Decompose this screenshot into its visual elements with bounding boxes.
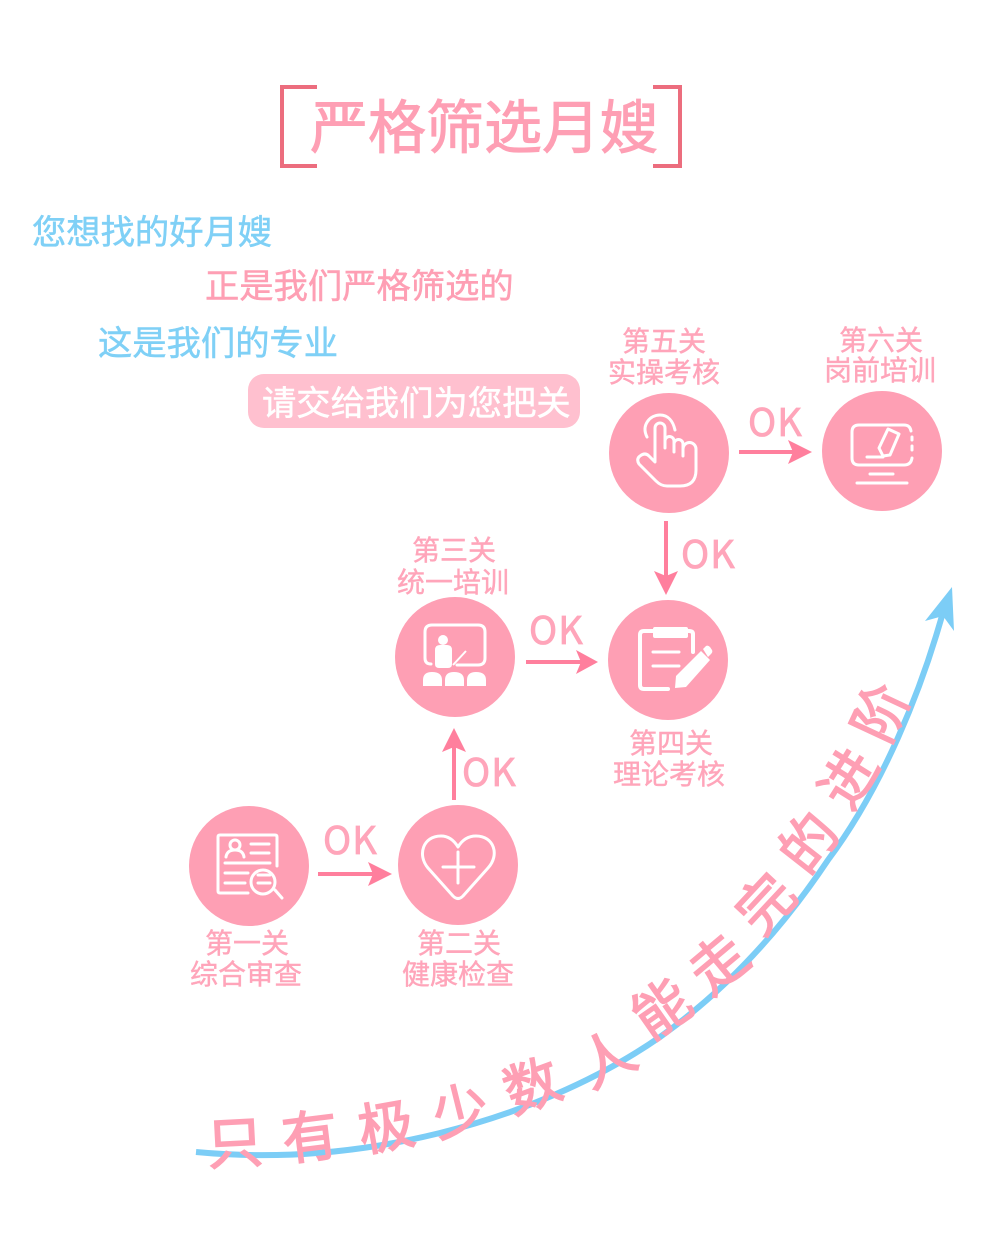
icon: classroom: [423, 625, 486, 686]
curved slogan text: 阶: [841, 674, 922, 751]
arrow: step 5 to 4: [654, 521, 736, 595]
arrow: step 5 to 6: [739, 392, 812, 464]
arrow: step 2 to 3: [442, 728, 517, 800]
curved slogan text: 数: [495, 1047, 570, 1126]
step 3: unified training: 统一培训: [397, 567, 509, 598]
intro text line 1: 您想找的好月嫂: [32, 214, 272, 252]
step 6: on-the-job training: [822, 325, 942, 511]
curved slogan text: 的: [767, 801, 851, 884]
curved slogan text: 能: [621, 967, 703, 1051]
title text: 严格筛选月嫂: [310, 96, 658, 161]
curved slogan text: [205, 674, 922, 1176]
arrow: step 3 to 4: [526, 600, 598, 674]
icon: tapping hand: [638, 415, 696, 486]
label: 第四关: [629, 728, 713, 759]
curved slogan text: 走: [677, 922, 761, 1006]
icon: clipboard and pencil: [640, 627, 712, 689]
arrow: step 1 to 2: OK: [323, 810, 378, 865]
arrow: step 3 to 4: OK: [529, 600, 584, 655]
label: 第一关: [205, 928, 289, 959]
callout pill: 请交给我们为您把关: [262, 385, 571, 423]
intro text line 2: 正是我们严格筛选的: [205, 268, 514, 306]
curved slogan text: 人: [567, 1019, 646, 1100]
step 2: health check: 健康检查: [402, 959, 514, 990]
arrow: step 5 to 4: OK: [681, 524, 736, 579]
icon: heart with plus: [422, 836, 494, 898]
callout pill: [248, 374, 580, 428]
step 4: theory exam: 理论考核: [613, 759, 725, 790]
curved slogan text: 少: [426, 1074, 495, 1149]
arrow: step 1 to 2: [318, 810, 392, 886]
step 4: theory exam: [608, 600, 728, 790]
curved slogan text: 极: [353, 1092, 419, 1163]
step 5: practical exam: [608, 326, 729, 513]
arrow: step 5 to 6: OK: [748, 392, 803, 447]
label: 第五关: [622, 326, 706, 357]
curved slogan text: 进: [808, 738, 891, 819]
label: 第二关: [417, 928, 501, 959]
title: [282, 87, 680, 166]
step 2: health check: [398, 805, 518, 990]
step 6: on-the-job training: 岗前培训: [824, 355, 936, 386]
label: 第六关: [839, 325, 923, 356]
label: 第三关: [412, 535, 496, 566]
intro text line 3: 这是我们的专业: [98, 325, 338, 363]
step 5: practical exam: 实操考核: [608, 357, 720, 388]
step 1: comprehensive review: 综合审查: [190, 959, 302, 990]
curved slogan text: 完: [724, 862, 808, 946]
curved slogan text: 有: [279, 1103, 342, 1172]
step 1: comprehensive review: [189, 806, 309, 990]
arrow: step 2 to 3: OK: [462, 742, 517, 797]
icon: document with magnifier: [218, 835, 282, 898]
icon: monitor with pen: [852, 425, 912, 483]
title brackets: [282, 87, 680, 166]
step 3: unified training: [395, 535, 515, 717]
curved blue arrow: [196, 587, 954, 1155]
curved slogan text: 只: [205, 1111, 265, 1176]
